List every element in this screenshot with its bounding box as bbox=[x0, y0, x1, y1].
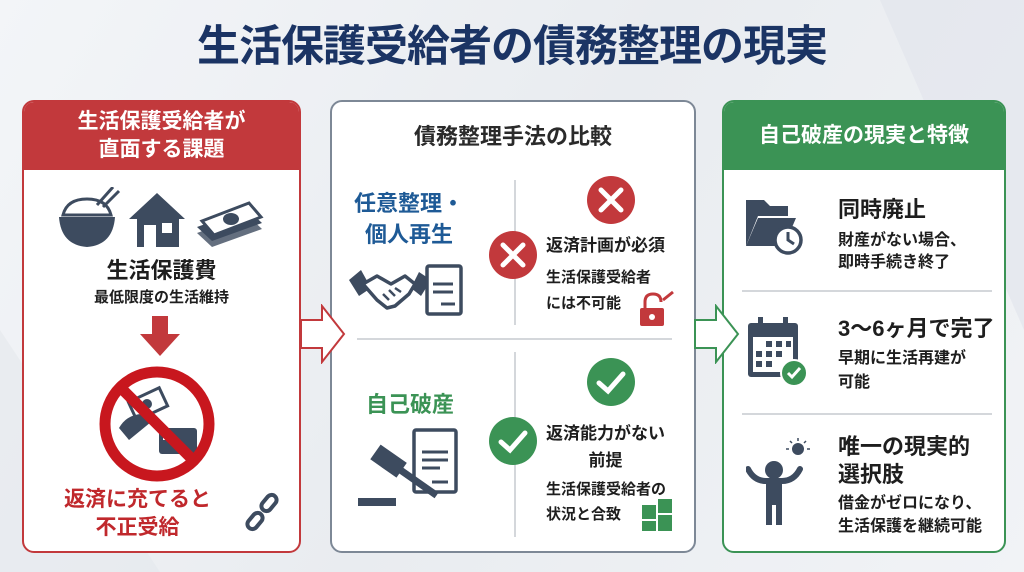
text: repayment plan required: 返済計画が必須 bbox=[546, 236, 665, 255]
icon: broken chain bbox=[245, 492, 279, 532]
text: illegal receipt bbox=[64, 488, 211, 539]
panel: challenges bbox=[22, 100, 301, 553]
icon: gavel and document bbox=[358, 428, 458, 506]
text: illegal receipt: 返済に充てると bbox=[64, 488, 211, 511]
panel: bankruptcy features: 即時手続き終了 bbox=[838, 254, 950, 271]
panel: bankruptcy features: 生活保護を継続可能 bbox=[838, 518, 982, 535]
panel: bankruptcy features: 財産がない場合、 bbox=[838, 232, 966, 249]
arrow: down bbox=[140, 316, 180, 356]
header: challenges: 生活保護受給者が bbox=[78, 110, 246, 133]
panel: bankruptcy features: 借金がゼロになり、 bbox=[838, 495, 981, 512]
header: challenges: 直面する課題 bbox=[98, 138, 224, 161]
text: matches situation bbox=[546, 481, 666, 523]
panel: bankruptcy features bbox=[722, 100, 1006, 553]
arrow: left to middle bbox=[301, 304, 346, 364]
text: illegal receipt: 不正受給 bbox=[96, 516, 180, 539]
icon: folder clock bbox=[746, 200, 803, 255]
icons: rice house money bbox=[59, 187, 264, 247]
panel: bankruptcy features: 可能 bbox=[838, 374, 870, 391]
icon: prohibition bbox=[100, 366, 214, 482]
text: matches situation: 生活保護受給者の bbox=[546, 481, 666, 498]
icon: lock bbox=[640, 290, 674, 326]
icon: calendar check bbox=[748, 317, 806, 385]
text: impossible bbox=[546, 269, 651, 312]
text: impossible: には不可能 bbox=[546, 295, 621, 312]
text: no ability to repay bbox=[546, 424, 665, 470]
header: challenges bbox=[24, 102, 299, 170]
header: features bbox=[724, 102, 1004, 170]
icon: person sun bbox=[746, 438, 810, 525]
panel: comparison bbox=[330, 100, 696, 553]
text: no ability to repay: 前提 bbox=[588, 451, 622, 470]
text: only realistic option: 唯一の現実的 bbox=[838, 434, 970, 459]
icon: green check large bbox=[587, 358, 635, 406]
text: voluntary / individual bbox=[354, 191, 464, 247]
icon: green check small bbox=[489, 417, 537, 465]
text: living allowance: 生活保護費 bbox=[106, 258, 216, 283]
text: matches situation: 状況と合致 bbox=[546, 506, 621, 523]
icon: puzzle bbox=[642, 499, 672, 531]
panel: bankruptcy features: 早期に生活再建が bbox=[838, 350, 966, 367]
text: no ability to repay: 返済能力がない bbox=[546, 424, 665, 443]
text: minimum living: 最低限度の生活維持 bbox=[94, 289, 229, 306]
icon: handshake and document bbox=[349, 264, 463, 316]
text: bankruptcy: 自己破産 bbox=[366, 392, 454, 417]
text: only realistic option: 選択肢 bbox=[838, 462, 904, 487]
header: features: 自己破産の現実と特徴 bbox=[759, 124, 969, 147]
text: impossible: 生活保護受給者 bbox=[546, 269, 651, 286]
text: only realistic option bbox=[838, 434, 970, 487]
text: voluntary / individual: 個人再生 bbox=[365, 222, 453, 247]
text: voluntary / individual: 任意整理・ bbox=[354, 191, 464, 216]
text: simultaneous abolition: 同時廃止 bbox=[838, 197, 926, 222]
title: 生活保護受給者の債務整理の現実 bbox=[197, 23, 827, 71]
icon: red x small bbox=[489, 231, 537, 279]
text: 3-6 months: 3〜6ヶ月で完了 bbox=[838, 316, 994, 341]
header: comparison: 債務整理手法の比較 bbox=[414, 124, 612, 149]
arrow: middle to right bbox=[694, 304, 740, 364]
icon: red x large bbox=[587, 176, 635, 224]
